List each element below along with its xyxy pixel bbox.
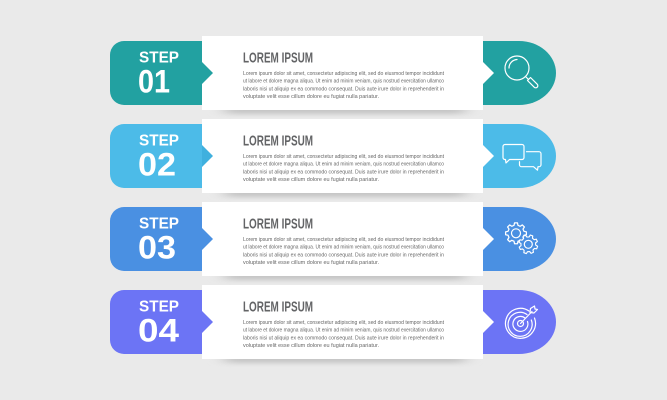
arrow: step 1 (202, 62, 213, 84)
text block: step 2 (243, 154, 444, 183)
right tab: step 4 (483, 290, 556, 354)
left tab: step 3 (110, 207, 202, 271)
arrow: step 3 (202, 228, 213, 250)
icon: speech bubbles (503, 144, 541, 170)
number: step 1: 01 (138, 64, 170, 100)
icon: target with arrow (505, 306, 538, 338)
text block: step 2: Lorem ipsum dolor sit amet, consectetur adipiscing elit, sed do eiusmod tempor incididunt (243, 154, 444, 160)
text block: step 1 (243, 71, 444, 100)
number: step 3: 03 (138, 230, 176, 266)
card shadow: step 4 (225, 355, 465, 363)
panel: step 1 (110, 36, 556, 114)
card shadow: step 3 (225, 272, 465, 280)
text block: step 3: Lorem ipsum dolor sit amet, consectetur adipiscing elit, sed do eiusmod tempor incididunt (243, 237, 444, 243)
text block: step 2: ut labore et dolore magna aliqua. Ut enim ad minim veniam, quis nostrud exercitation ullamco (243, 162, 444, 168)
card: step 2 (202, 119, 494, 193)
number: step 2: 02 (138, 147, 176, 183)
card: step 4 (202, 285, 494, 359)
text block: step 3: ut labore et dolore magna aliqua. Ut enim ad minim veniam, quis nostrud exercitation ullamco (243, 245, 444, 251)
text block: step 4 (243, 320, 444, 349)
heading: step 3: LOREM IPSUM (243, 216, 313, 233)
label: step 2: STEP (139, 133, 179, 150)
text block: step 4: Lorem ipsum dolor sit amet, consectetur adipiscing elit, sed do eiusmod tempor incididunt (243, 320, 444, 326)
text block: step 3: voluptate velit esse cillum dolore eu fugiat nulla pariatur. (243, 260, 379, 266)
left tab: step 1 (110, 41, 202, 105)
text block: step 4: voluptate velit esse cillum dolore eu fugiat nulla pariatur. (243, 343, 379, 349)
text block: step 3 (243, 237, 444, 266)
card shadow: step 2 (225, 189, 465, 197)
label: step 3: STEP (139, 216, 179, 233)
icon: gears (506, 223, 540, 256)
heading: step 4: LOREM IPSUM (243, 299, 313, 316)
heading: step 2: LOREM IPSUM (243, 133, 313, 150)
text block: step 1: voluptate velit esse cillum dolore eu fugiat nulla pariatur. (243, 94, 379, 100)
arrow: step 2 (202, 145, 213, 167)
label: step 1: STEP (139, 50, 179, 67)
card: step 1 (202, 36, 494, 110)
left tab: step 4 (110, 290, 202, 354)
left tab: step 2 (110, 124, 202, 188)
right tab: step 1 (483, 41, 556, 105)
panel: step 4 (110, 285, 556, 363)
text block: step 1: laboris nisi ut aliquip ex ea commodo consequat. Duis aute irure dolor in reprehenderit in (243, 86, 444, 92)
right tab: step 2 (483, 124, 556, 188)
panel: step 3 (110, 202, 556, 280)
card shadow: step 1 (225, 106, 465, 114)
text block: step 4: laboris nisi ut aliquip ex ea commodo consequat. Duis aute irure dolor in reprehenderit in (243, 335, 444, 341)
text block: step 3: laboris nisi ut aliquip ex ea commodo consequat. Duis aute irure dolor in reprehenderit in (243, 252, 444, 258)
text block: step 2: voluptate velit esse cillum dolore eu fugiat nulla pariatur. (243, 177, 379, 183)
card: step 3 (202, 202, 494, 276)
text block: step 4: ut labore et dolore magna aliqua. Ut enim ad minim veniam, quis nostrud exercitation ullamco (243, 328, 444, 334)
number: step 4: 04 (138, 313, 179, 349)
text block: step 2: laboris nisi ut aliquip ex ea commodo consequat. Duis aute irure dolor in reprehenderit in (243, 169, 444, 175)
heading: step 1: LOREM IPSUM (243, 50, 313, 67)
right tab: step 3 (483, 207, 556, 271)
arrow: step 4 (202, 311, 213, 333)
icon: magnifying glass (505, 56, 538, 88)
label: step 4: STEP (139, 299, 179, 316)
text block: step 1: ut labore et dolore magna aliqua. Ut enim ad minim veniam, quis nostrud exercitation ullamco (243, 79, 444, 85)
text block: step 1: Lorem ipsum dolor sit amet, consectetur adipiscing elit, sed do eiusmod tempor incididunt (243, 71, 444, 77)
panel: step 2 (110, 119, 556, 197)
